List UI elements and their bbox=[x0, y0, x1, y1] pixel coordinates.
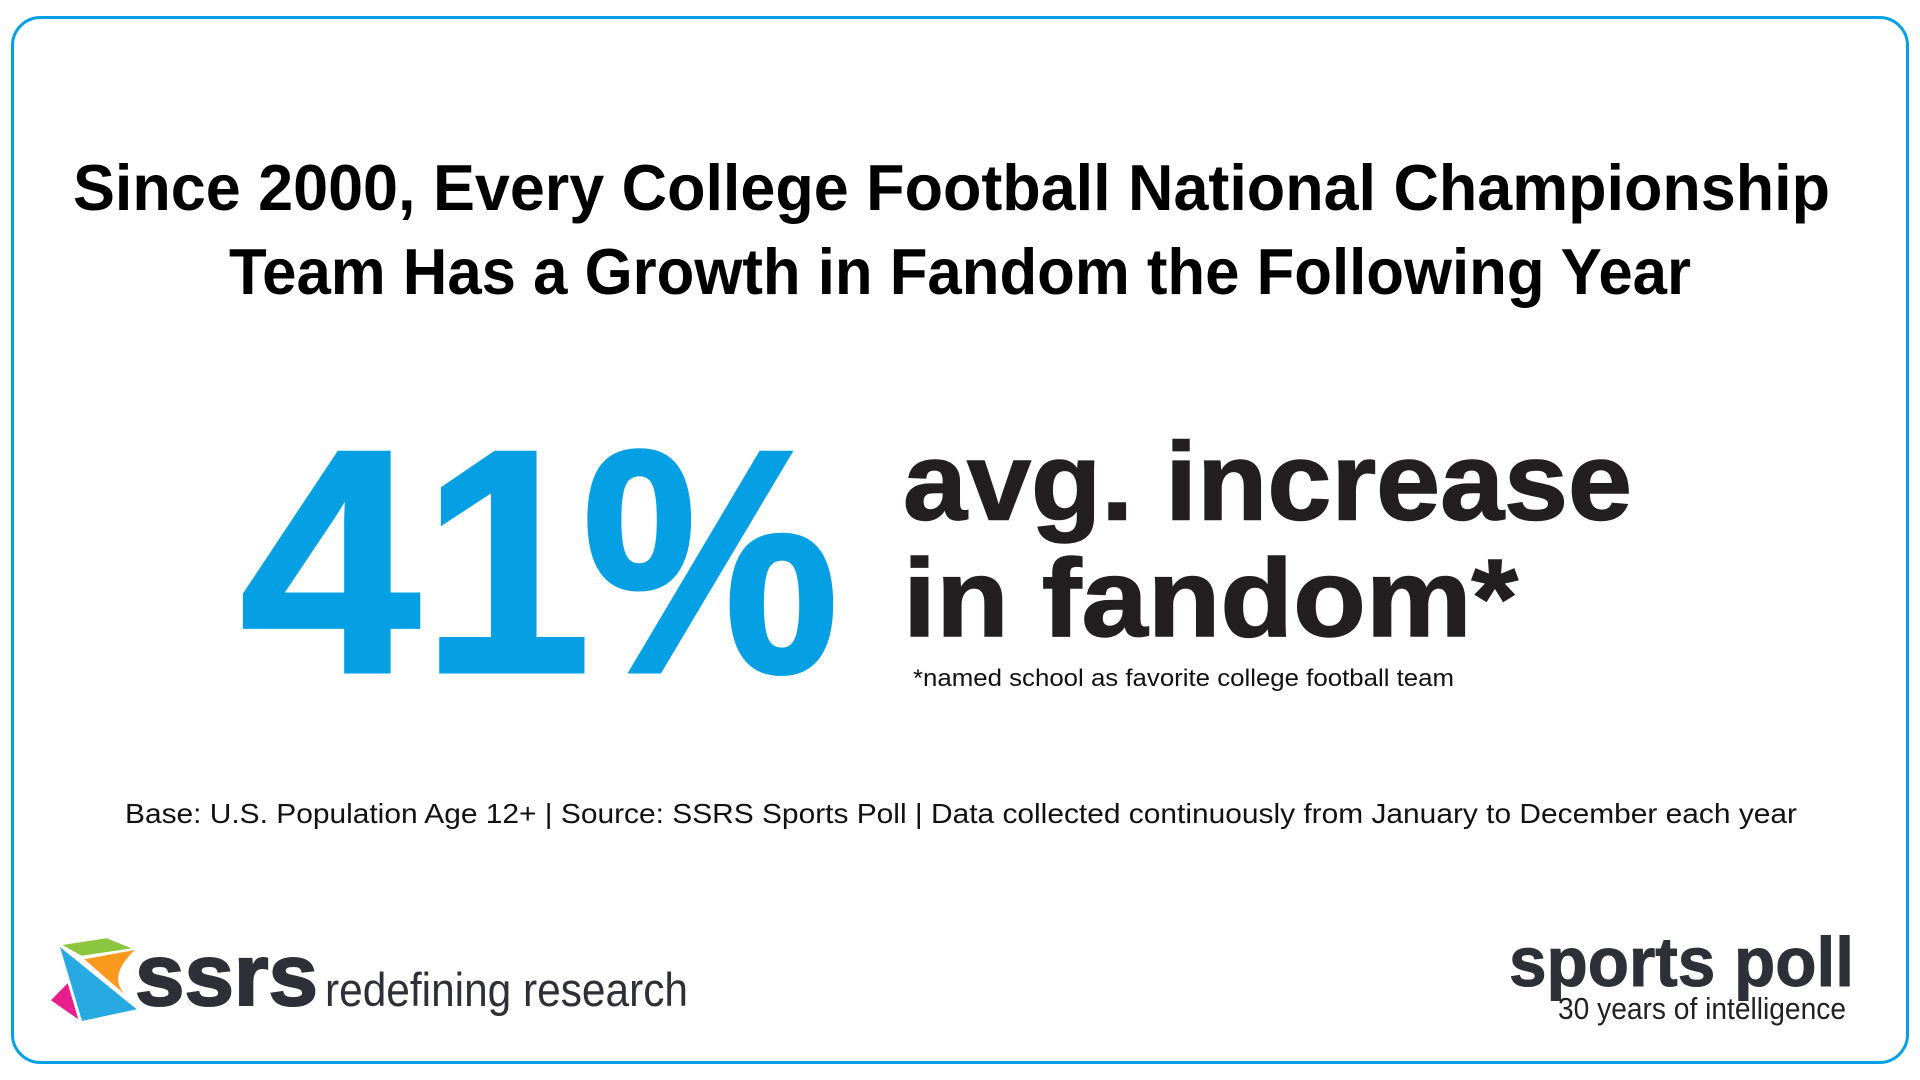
title line 2: Team Has a Growth in Fandom the Following Year bbox=[229, 235, 1691, 308]
title line 1: Since 2000, Every College Football National Championship bbox=[73, 151, 1830, 224]
big stat: 41%: 4 bbox=[240, 384, 422, 740]
tagline: redefining research: redefining research bbox=[325, 963, 688, 1016]
big stat: 41%: % bbox=[582, 384, 839, 740]
title bbox=[73, 151, 1830, 308]
footnote: *named school as favorite college football team bbox=[913, 665, 1454, 692]
wordmark: sports poll: sports poll bbox=[1509, 923, 1854, 1001]
big stat: 41%: 1 bbox=[422, 384, 591, 740]
icon: SSRS mark bbox=[51, 938, 137, 1021]
tagline: 30 years of intelligence: 30 years of intelligence bbox=[1558, 991, 1846, 1026]
stat line 2: in fandom* bbox=[903, 537, 1518, 660]
stat description bbox=[903, 420, 1632, 660]
stat line 1: avg. increase bbox=[903, 420, 1632, 544]
logo: sports poll bbox=[1509, 923, 1854, 1026]
wordmark: ssrs: ssrs bbox=[135, 927, 318, 1024]
big stat: 41% bbox=[240, 384, 839, 740]
logo: SSRS bbox=[51, 927, 688, 1024]
source line: Base: U.S. Population Age 12+ | Source: SSRS Sports Poll | Data collected continuously from January to December each year bbox=[125, 798, 1797, 829]
